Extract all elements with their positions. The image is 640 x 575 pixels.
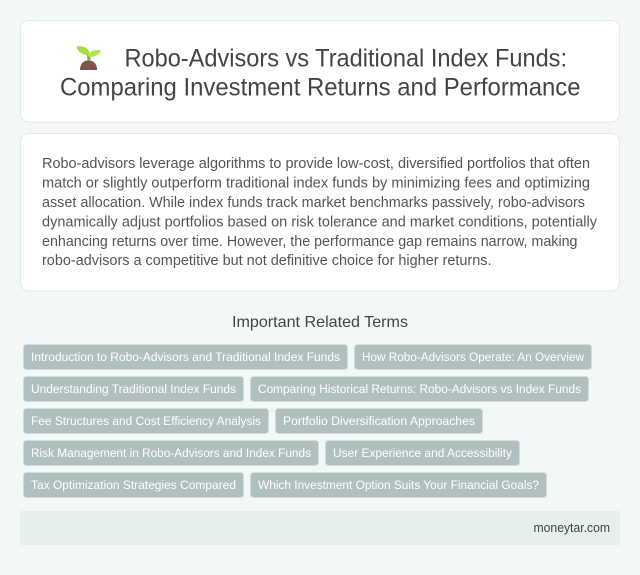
summary text: robo-advisors a competitive but not definitive choice for higher returns.: [42, 253, 492, 269]
tag: Introduction to Robo-Advisors and Traditional Index Funds: [31, 350, 340, 364]
tag: Which Investment Option Suits Your Financial Goals?: [258, 478, 539, 492]
summary text: dynamically adjust portfolios based on risk tolerance and market conditions, potentially: [42, 214, 598, 230]
title line 2: Comparing Investment Returns and Performance: [60, 74, 580, 102]
tag: [24, 376, 244, 402]
summary text: enhancing returns over time. However, the performance gap remains narrow, making: [42, 234, 578, 250]
tag: [326, 440, 520, 466]
tag: Portfolio Diversification Approaches: [283, 414, 475, 428]
panel: summary card: [20, 134, 620, 291]
summary text: match or slightly outperform traditional index funds by minimizing fees and optimizing: [42, 176, 590, 192]
icon: seedling: [76, 46, 101, 70]
title line 1: Robo-Advisors vs Traditional Index Funds:: [124, 44, 567, 72]
tag: [354, 344, 592, 370]
tag: [276, 408, 482, 434]
tag: Tax Optimization Strategies Compared: [31, 478, 236, 492]
tag: Comparing Historical Returns: Robo-Advisors vs Index Funds: [258, 382, 581, 396]
tag: [24, 440, 318, 466]
footer: [20, 511, 620, 545]
tag: Risk Management in Robo-Advisors and Index Funds: [31, 446, 311, 460]
tag: [250, 472, 546, 498]
tag: Understanding Traditional Index Funds: [31, 382, 236, 396]
tag: Fee Structures and Cost Efficiency Analysis: [31, 414, 261, 428]
summary text: asset allocation. While index funds track market benchmarks passively, robo-advisors: [42, 195, 585, 211]
summary text: Robo-advisors leverage algorithms to provide low-cost, diversified portfolios that often: [42, 156, 590, 172]
tag list: [24, 344, 592, 498]
tag: [24, 472, 244, 498]
summary text: [42, 156, 598, 269]
tag: User Experience and Accessibility: [333, 446, 513, 460]
heading: related terms: Important Related Terms: [232, 314, 408, 331]
panel: title card: [20, 20, 620, 122]
tag: [24, 344, 348, 370]
tag: How Robo-Advisors Operate: An Overview: [362, 350, 584, 364]
tag: [24, 408, 268, 434]
footer site name: moneytar.com: [534, 521, 610, 535]
tag: [250, 376, 588, 402]
